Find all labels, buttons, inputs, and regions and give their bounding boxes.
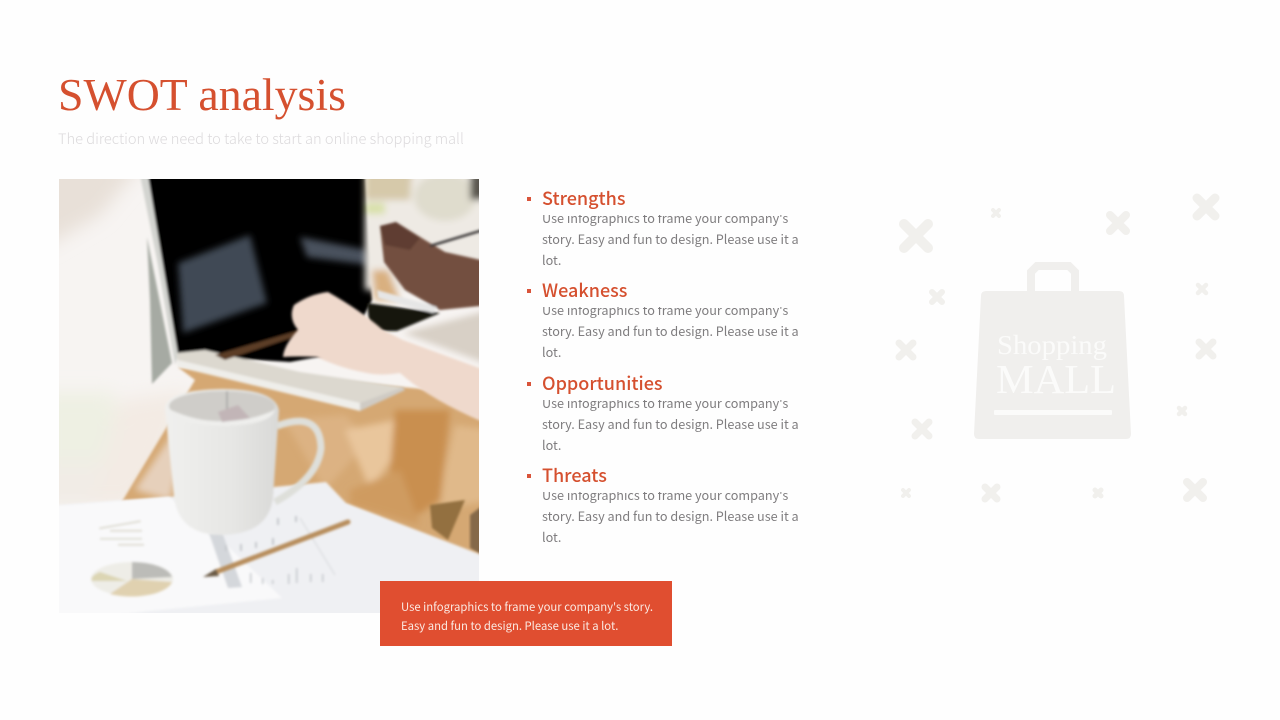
photo: laptop, mug and papers on a desk bbox=[59, 179, 479, 613]
list item: Threats: lot. bbox=[542, 527, 561, 546]
background items and far hand bbox=[365, 170, 490, 365]
bag label: Shopping bbox=[997, 330, 1107, 360]
list item: Opportunities: Opportunities bbox=[542, 370, 663, 396]
callout text: Easy and fun to design. Please use it a lot. bbox=[401, 618, 618, 634]
list item: Strengths: Strengths bbox=[542, 185, 626, 211]
list item: Weakness: Weakness bbox=[542, 277, 627, 303]
paper stack bbox=[40, 482, 490, 625]
shopping bag: MALL bbox=[996, 356, 1116, 402]
list item: Weakness: lot. bbox=[542, 342, 561, 361]
list item: Strengths: lot. bbox=[542, 250, 561, 269]
list item: Strengths: story. Easy and fun to design. Please use it a bbox=[542, 229, 799, 248]
shopping bag bbox=[974, 266, 1131, 439]
list item: Threats bbox=[527, 462, 799, 546]
SWOT list bbox=[527, 185, 799, 546]
laptop bbox=[139, 170, 405, 411]
pie chart on paper bbox=[91, 562, 173, 597]
desk bbox=[120, 367, 490, 565]
near hand and arm bbox=[283, 292, 490, 425]
list item: Opportunities: lot. bbox=[542, 435, 561, 454]
list item: Opportunities: story. Easy and fun to design. Please use it a bbox=[542, 414, 799, 433]
list item: Threats: story. Easy and fun to design. Please use it a bbox=[542, 506, 799, 525]
list item: Weakness: story. Easy and fun to design. Please use it a bbox=[542, 321, 799, 340]
list item: Opportunities bbox=[527, 370, 799, 454]
list item: Weakness bbox=[527, 277, 799, 361]
callout bbox=[380, 581, 672, 646]
mug bbox=[165, 389, 321, 535]
callout text: Use infographics to frame your company's story. bbox=[401, 599, 653, 615]
scattered crosses bbox=[899, 198, 1215, 499]
list item: Strengths bbox=[527, 185, 799, 269]
screen reflections bbox=[178, 235, 370, 333]
illustration: shopping mall bag with scattered crosses bbox=[896, 194, 1220, 502]
window and blurred left background bbox=[40, 160, 190, 507]
callout text bbox=[401, 599, 653, 634]
list item: Threats: Threats bbox=[542, 462, 607, 488]
chart details on paper bbox=[99, 516, 335, 588]
pencil bbox=[203, 522, 348, 577]
subtitle: The direction we need to take to start an online shopping mall bbox=[58, 128, 464, 149]
title: SWOT analysis bbox=[58, 69, 346, 120]
